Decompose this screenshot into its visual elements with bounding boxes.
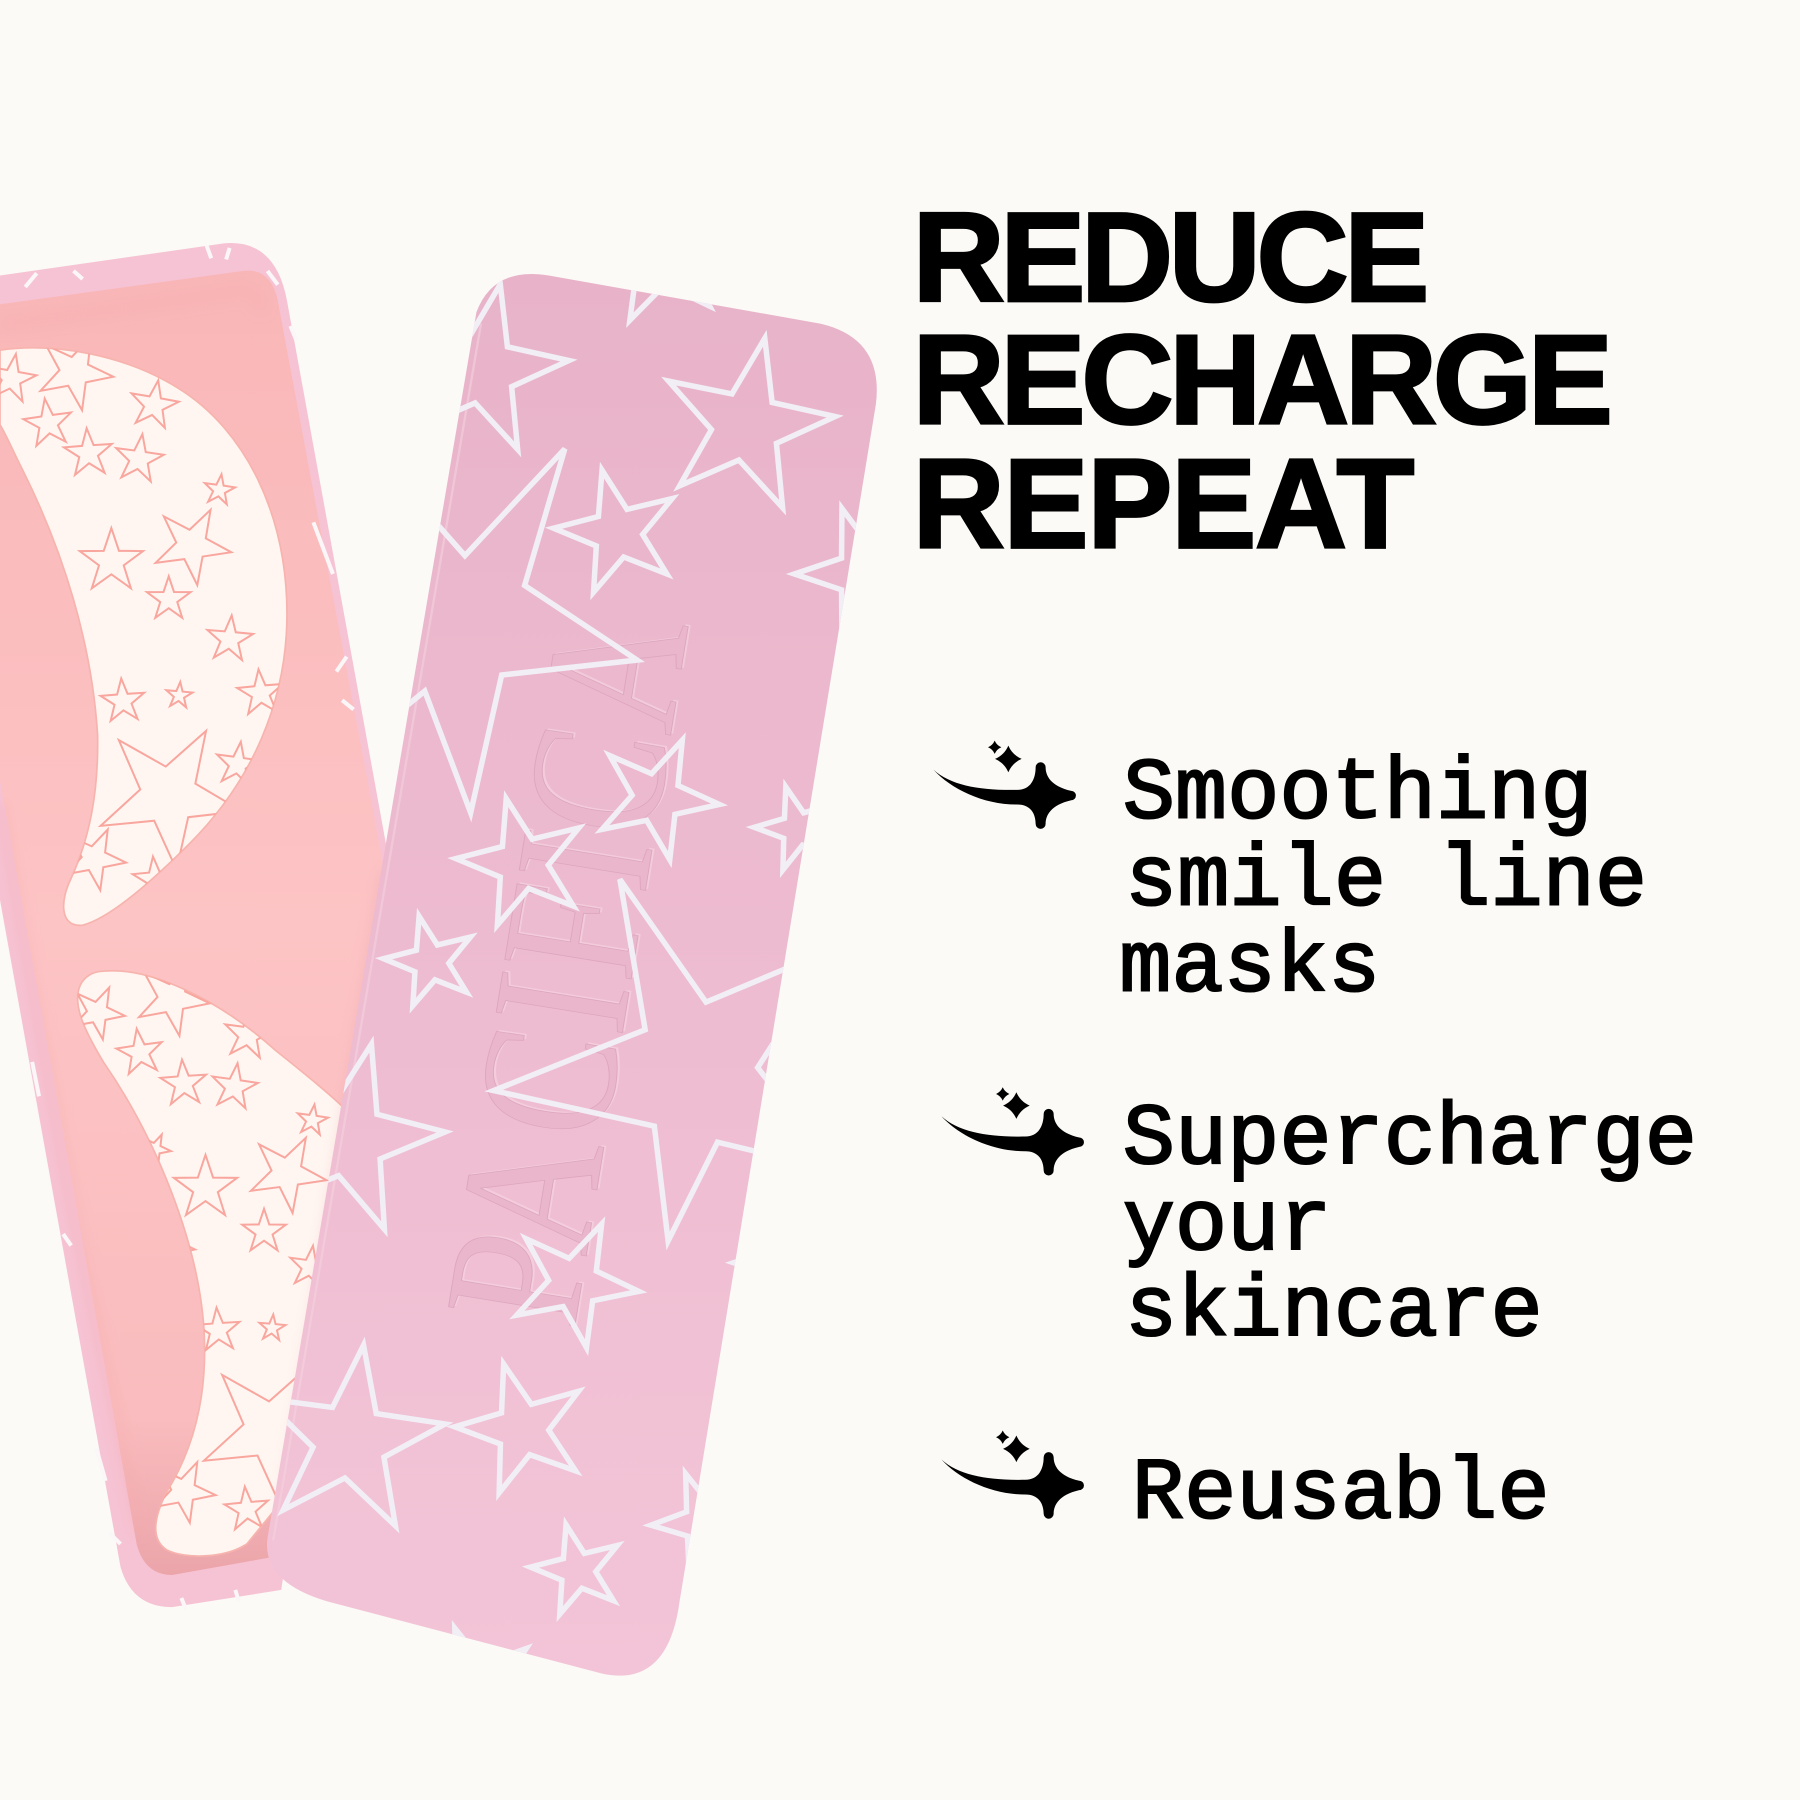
mask 1 star print	[0, 321, 285, 900]
tray ledge shade	[0, 291, 262, 1533]
benefit 1 text: masks	[1119, 920, 1380, 1018]
benefit 2 text: your	[1123, 1178, 1332, 1276]
product: open tin base with masks	[0, 243, 388, 1609]
title: RECHARGE	[913, 310, 1613, 452]
rim star marks	[25, 246, 354, 1609]
tin inner tray	[0, 271, 385, 1575]
benefit 1 text	[1119, 746, 1647, 1018]
benefit 2 text: Supercharge	[1123, 1092, 1697, 1190]
icon: sparkle swoosh 1	[933, 741, 1076, 829]
lid edge highlight	[273, 324, 481, 1541]
title: REPEAT	[913, 434, 1414, 576]
lid shadow	[276, 872, 396, 1552]
mask 1	[0, 321, 287, 925]
lid plate	[267, 274, 877, 1676]
icon: sparkle swoosh 2	[941, 1087, 1084, 1176]
benefit 1 text: Smoothing	[1123, 746, 1593, 844]
title	[913, 187, 1613, 576]
benefit 2 text: skincare	[1125, 1264, 1543, 1362]
benefit 1 text: smile line	[1125, 834, 1647, 932]
benefit 1	[933, 741, 1647, 1018]
mask 2	[76, 970, 342, 1557]
title: REDUCE	[913, 187, 1429, 329]
lid white star outlines	[277, 280, 856, 1654]
icon: sparkle swoosh 3	[941, 1431, 1084, 1519]
benefit 3 text: Reusable	[1132, 1447, 1550, 1545]
benefit 2	[941, 1087, 1697, 1362]
mask 2 star print	[78, 975, 331, 1532]
product: tin lid with star pattern	[267, 274, 877, 1676]
embossed brand name: PACIFICA	[404, 598, 731, 1339]
benefit 2 text	[1123, 1092, 1697, 1362]
benefit 3	[941, 1431, 1550, 1545]
tin base rim	[0, 243, 388, 1607]
embossed brand name: PACIFICA	[406, 596, 733, 1337]
